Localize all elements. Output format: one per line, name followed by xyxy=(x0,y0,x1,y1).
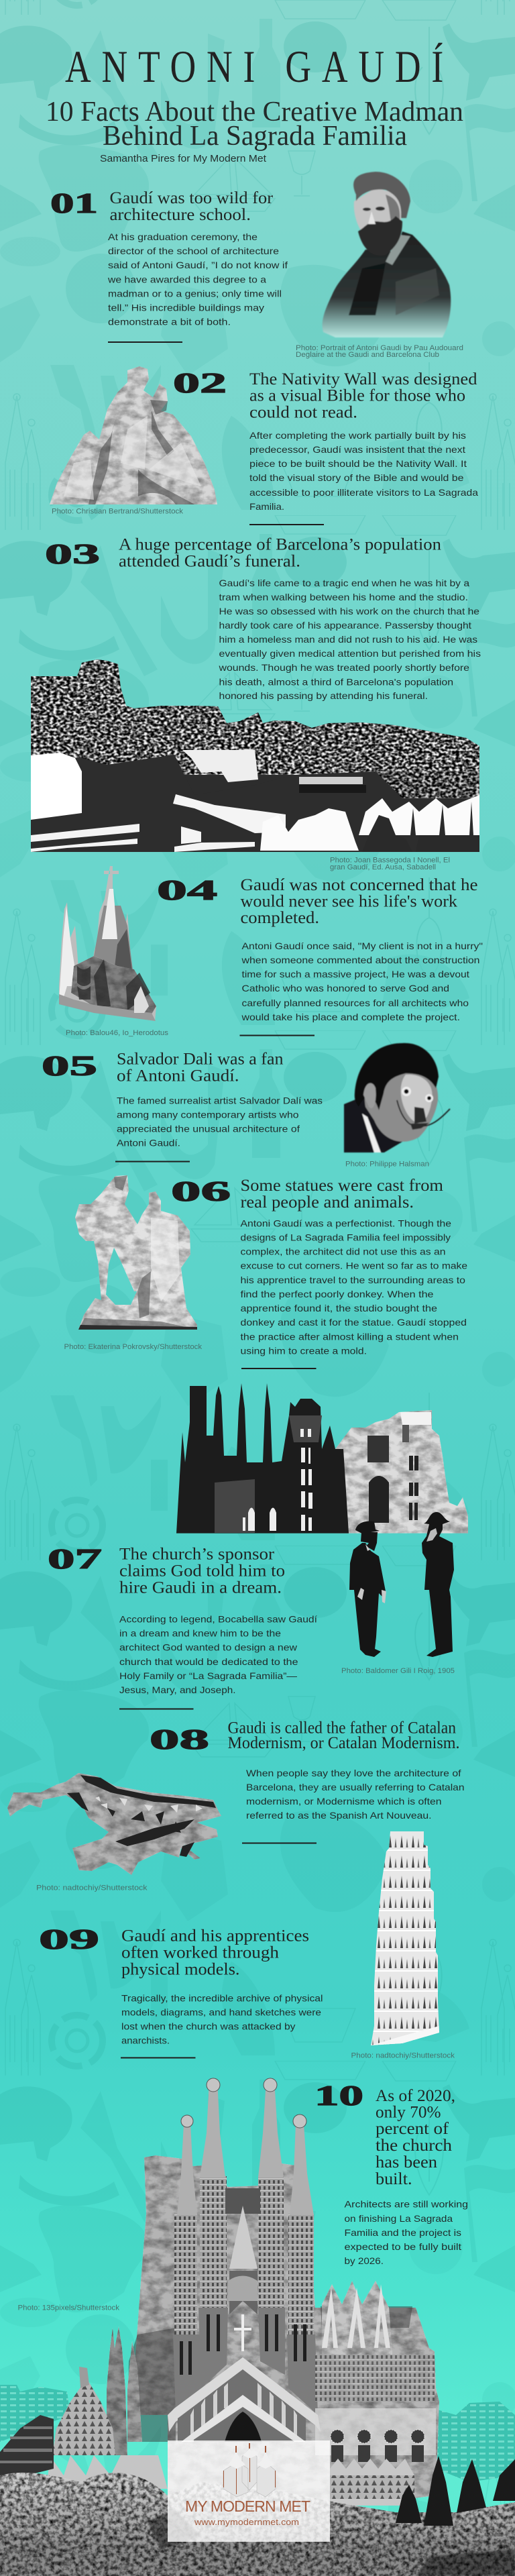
body 05: appreciated the unusual architecture of xyxy=(117,1123,300,1134)
photo: foreground trees xyxy=(0,2456,515,2576)
body 10: expected to be fully built xyxy=(345,2241,461,2252)
body 09 xyxy=(121,1992,323,2046)
heading 10: the church xyxy=(376,2137,453,2155)
body 03: tram when walking between his home and the studio. xyxy=(219,592,468,602)
body 07: Jesus, Mary, and Joseph. xyxy=(119,1684,236,1695)
panel: fact 10 and basilica xyxy=(0,2078,515,2576)
body 09: anarchists. xyxy=(121,2035,170,2046)
photo: funeral crowd xyxy=(31,657,480,852)
number 02: 02 xyxy=(173,368,227,399)
body 06: designs of La Sagrada Familia feel impossibly xyxy=(240,1232,451,1242)
body 03: He was so obsessed with his work on the church that he xyxy=(219,606,479,616)
body 02: accessible to poor illiterate visitors to La Sagrada xyxy=(249,487,478,498)
heading 04: would never see his life's work xyxy=(240,892,458,911)
heading 03: attended Gaudí’s funeral. xyxy=(119,553,300,570)
heading 08 xyxy=(228,1719,460,1752)
photo: two men talking xyxy=(349,1512,454,1657)
body 06: excuse to cut corners. He went so far as to make xyxy=(240,1260,467,1271)
body 03: him a homeless man and did not rush to his aid. He was xyxy=(219,634,477,645)
body 03: honored his passing by attending his funeral. xyxy=(219,690,428,701)
body 03: hardly took care of his appearance. Passersby thought xyxy=(219,620,471,631)
panel: fact 06 xyxy=(64,1175,467,1369)
caption 09: Photo: nadtochiy/Shutterstock xyxy=(351,2051,455,2059)
heading 10: has been xyxy=(376,2153,438,2171)
panel: fact 09 xyxy=(39,1830,455,2059)
photo: Barcelona city background xyxy=(0,2385,515,2482)
body 08: When people say they love the architecture of xyxy=(246,1768,461,1778)
subtitle: 10 Facts About the Creative Madman xyxy=(46,97,463,127)
body 07: architect God wanted to design a new xyxy=(119,1642,298,1653)
caption 01 xyxy=(296,344,463,359)
body 03: eventually given medical attention but perished from his xyxy=(219,648,481,659)
body 05: The famed surrealist artist Salvador Dalí was xyxy=(117,1095,323,1106)
heading 09: often worked through xyxy=(121,1944,280,1962)
body 05 xyxy=(117,1095,323,1148)
number 04: 04 xyxy=(157,875,217,906)
number 07: 07 xyxy=(48,1544,102,1575)
panel: fact 01 xyxy=(50,172,463,359)
body 07 xyxy=(119,1614,317,1695)
number 05: 05 xyxy=(42,1051,97,1082)
body 04 xyxy=(241,941,483,1022)
caption 01: Photo: Portrait of Antoni Gaudi by Pau Audouard xyxy=(296,344,463,352)
caption 06: Photo: Ekaterina Pokrovsky/Shutterstock xyxy=(64,1343,203,1351)
heading 02 xyxy=(249,370,477,421)
body 01: said of Antoni Gaudí, ”I do not know if xyxy=(108,260,288,270)
heading 01 xyxy=(110,189,274,224)
heading 04: Gaudí was not concerned that he xyxy=(240,876,477,894)
body 06 xyxy=(240,1218,467,1356)
panel: fact 02 xyxy=(50,366,478,525)
heading 07 xyxy=(119,1546,285,1597)
heading 08: Modernism, or Catalan Modernism. xyxy=(228,1734,460,1752)
body 05: Antoni Gaudí. xyxy=(117,1138,180,1148)
body 04: when someone commented about the construction xyxy=(241,955,480,965)
photo: nativity sculpture xyxy=(50,366,217,504)
body 04: carefully planned resources for all architects who xyxy=(241,998,469,1008)
body 07: According to legend, Bocabella saw Gaudí xyxy=(119,1614,317,1625)
body 08: Barcelona, they are usually referring to Catalan xyxy=(246,1782,464,1792)
heading 10: built. xyxy=(376,2170,412,2188)
body 01: demonstrate a bit of both. xyxy=(108,317,231,327)
heading 05 xyxy=(117,1051,284,1085)
body 09: lost when the church was attacked by xyxy=(121,2021,295,2031)
photo: Salvador Dalí xyxy=(344,1043,450,1152)
body 10: on finishing La Sagrada xyxy=(345,2213,453,2224)
photo: Flight into Egypt statue xyxy=(75,1175,197,1330)
body 06: find the perfect poorly donkey. When the xyxy=(240,1289,434,1299)
body 02: Familia. xyxy=(249,501,284,512)
panel: fact 04 xyxy=(59,866,483,1037)
caption 05: Photo: Philippe Halsman xyxy=(345,1161,429,1169)
number 08: 08 xyxy=(150,1725,209,1756)
photo: model of the basilica xyxy=(59,866,156,1021)
heading 09: physical models. xyxy=(121,1960,240,1979)
body 04: Antoni Gaudí once said, "My client is not in a hurry" xyxy=(241,941,483,951)
panel: fact 03 xyxy=(31,535,481,871)
body 06: apprentice found it, the studio bought the xyxy=(240,1303,437,1313)
caption 04: Photo: Balou46, Io_Herodotus xyxy=(66,1029,169,1037)
heading 02: as a visual Bible for those who xyxy=(249,386,465,405)
caption 02: Photo: Christian Bertrand/Shutterstock xyxy=(52,507,184,515)
number 09: 09 xyxy=(39,1925,99,1955)
photo: white plaster tower model xyxy=(369,1830,443,2048)
body 01: tell.” His incredible buildings may xyxy=(108,302,264,313)
photo: La Sagrada Familia basilica xyxy=(0,2078,439,2509)
number 06: 06 xyxy=(171,1177,231,1208)
number 01: 01 xyxy=(50,189,98,219)
icon: three buildings xyxy=(223,2443,276,2497)
body 06: the practice after almost killing a student when xyxy=(240,1331,459,1342)
body 01: At his graduation ceremony, the xyxy=(108,231,258,242)
number 10: 10 xyxy=(314,2081,363,2112)
panel: fact 07 xyxy=(48,1383,468,1709)
number 03: 03 xyxy=(45,539,100,570)
body 03: his death, almost a third of Barcelona's population xyxy=(219,676,453,687)
body 06: Antoni Gaudí was a perfectionist. Though the xyxy=(240,1218,451,1229)
body 10: Architects are still working xyxy=(345,2199,468,2210)
body 01 xyxy=(107,231,288,327)
body 10: Familia and the project is xyxy=(345,2227,461,2238)
body 06: complex, the architect did not use this as an xyxy=(240,1246,445,1257)
photo: old Sagrada Familia construction xyxy=(176,1383,468,1534)
heading 06: real people and animals. xyxy=(240,1193,414,1212)
body 03 xyxy=(218,578,481,701)
heading 10 xyxy=(376,2087,455,2188)
body 04: Catholic who was honored to serve God and xyxy=(241,983,449,994)
body 09: Tragically, the incredible archive of physical xyxy=(121,1992,323,2003)
caption 10: Photo: 135pixels/Shutterstock xyxy=(17,2304,120,2312)
caption 08: Photo: nadtochiy/Shutterstock xyxy=(36,1884,148,1892)
body 02: After completing the work partially built by his xyxy=(249,430,466,441)
logo wordmark: MY MODERN MET xyxy=(185,2498,310,2515)
body 02 xyxy=(249,430,478,512)
heading 10: only 70% xyxy=(376,2104,441,2121)
photo: mosaic dragon xyxy=(7,1773,221,1875)
body 03: Gaudí's life came to a tragic end when he was hit by a xyxy=(219,578,469,588)
body 07: church that would be dedicated to the xyxy=(119,1656,298,1667)
heading 03: A huge percentage of Barcelona’s population xyxy=(119,535,442,554)
body 08 xyxy=(246,1768,464,1821)
panel: fact 05 xyxy=(42,1043,450,1169)
panel: fact 08 xyxy=(7,1719,464,1892)
body 02: piece to be built should be the Nativity Wall. It xyxy=(249,458,467,469)
heading 05: of Antoni Gaudí. xyxy=(117,1067,239,1085)
body 03: wounds. Though he was treated poorly shortly before xyxy=(218,662,469,673)
caption 03: gran Gaudí, Ed. Ausa, Sabadell xyxy=(330,863,436,871)
body 10 xyxy=(345,2199,468,2266)
heading 05: Salvador Dali was a fan xyxy=(117,1051,284,1068)
body 02: predecessor, Gaudí was insistent that the next xyxy=(249,444,465,455)
body 04: would take his place and complete the project. xyxy=(241,1012,460,1022)
body 06: donkey and cast it for the statue. Gaudí stopped xyxy=(240,1317,467,1328)
heading 04: completed. xyxy=(240,909,319,927)
byline: Samantha Pires for My Modern Met xyxy=(100,153,267,164)
caption 07: Photo: Baldomer Gili I Roig, 1905 xyxy=(341,1667,455,1675)
body 05: among many contemporary artists who xyxy=(117,1110,299,1120)
heading 09: Gaudí and his apprentices xyxy=(121,1927,309,1945)
body 07: in a dream and knew him to be the xyxy=(119,1627,281,1638)
heading 02: could not read. xyxy=(249,404,357,421)
logo URL: www.mymodernmet.com xyxy=(194,2517,299,2527)
heading 01: Gaudí was too wild for xyxy=(110,189,274,207)
heading 01: architecture school. xyxy=(110,206,251,224)
heading 10: percent of xyxy=(376,2120,449,2138)
heading 09 xyxy=(121,1927,309,1979)
body 06: his apprentice travel to the surrounding areas to xyxy=(240,1275,465,1285)
heading 10: As of 2020, xyxy=(376,2087,455,2105)
body 01: we have awarded this degree to a xyxy=(107,274,266,284)
heading 02: The Nativity Wall was designed xyxy=(249,370,477,388)
heading 06 xyxy=(240,1177,444,1212)
heading 07: hire Gaudi in a dream. xyxy=(119,1579,282,1597)
caption 03: Photo: Joan Bassegoda I Nonell, El xyxy=(330,856,450,864)
body 07: Holy Family or “La Sagrada Familia”— xyxy=(119,1670,297,1681)
logo: My Modern Met xyxy=(168,2440,330,2542)
heading 07: claims God told him to xyxy=(119,1562,285,1580)
heading 03 xyxy=(119,535,442,570)
body 04: time for such a massive project, He was a devout xyxy=(241,969,469,979)
body 02: told the visual story of the Bible and would be xyxy=(249,472,464,483)
subtitle xyxy=(46,97,463,152)
photo: portrait of Gaudí xyxy=(323,172,451,337)
heading 07: The church’s sponsor xyxy=(119,1546,275,1563)
body 09: models, diagrams, and hand sketches were xyxy=(121,2007,321,2018)
subtitle: Behind La Sagrada Familia xyxy=(103,121,407,152)
heading 06: Some statues were cast from xyxy=(240,1177,444,1195)
body 06: using him to create a mold. xyxy=(240,1346,367,1356)
body 01: director of the school of architecture xyxy=(108,246,279,256)
heading 08: Gaudi is called the father of Catalan xyxy=(228,1719,456,1737)
body 08: modernism, or Modernisme which is often xyxy=(246,1796,441,1807)
body 10: by 2026. xyxy=(345,2255,384,2266)
body 08: referred to as the Spanish Art Nouveau. xyxy=(246,1810,432,1821)
body 01: madman or to a genius; only time will xyxy=(108,288,282,299)
caption 03 xyxy=(330,856,450,871)
heading 04 xyxy=(240,876,477,927)
caption 01: Deglaire at the Gaudi and Barcelona Club xyxy=(296,351,439,359)
